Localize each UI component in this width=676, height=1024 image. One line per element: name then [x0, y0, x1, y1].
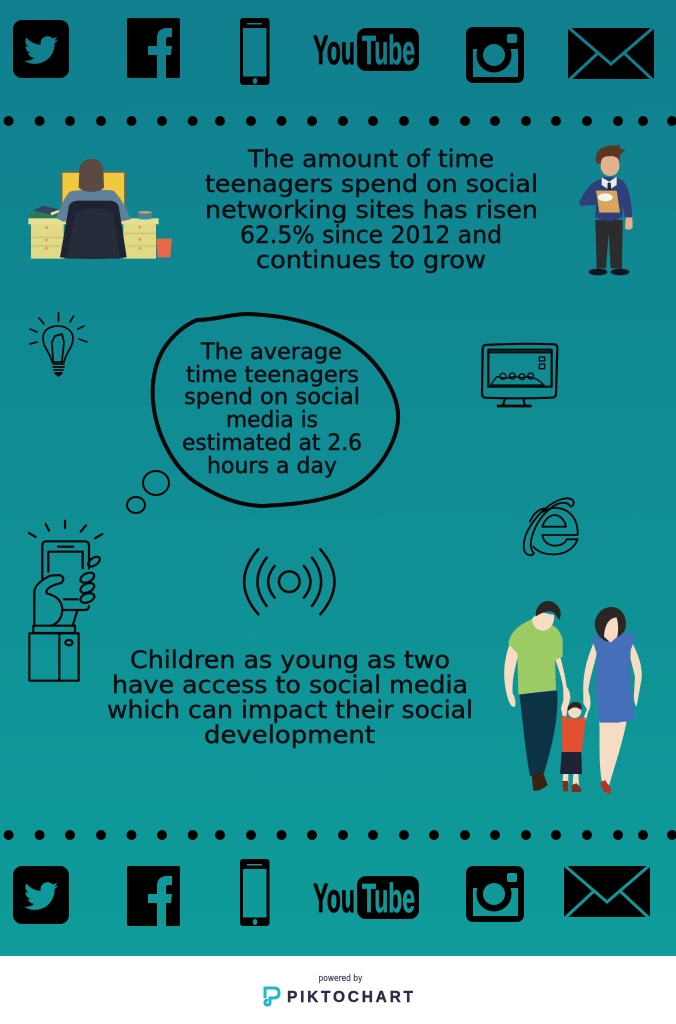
- top icon row: [13, 18, 654, 85]
- illustration: student: [579, 144, 633, 275]
- thought bubble: [127, 314, 398, 513]
- icon: facebook: [127, 866, 180, 926]
- icon: facebook: [127, 18, 180, 78]
- text block: time on social sites: 62.5% since 2012 and: [240, 221, 502, 249]
- text block: time on social sites: continues to grow: [256, 246, 486, 274]
- footer: powered by piktochart: [0, 956, 676, 1024]
- icon: youtube: You: [313, 27, 355, 73]
- text block: children: [107, 646, 473, 749]
- icon: broadcast signal: [244, 549, 334, 614]
- text block: children: Children as young as two: [130, 646, 450, 674]
- icon: youtube: Tube: [362, 875, 415, 921]
- icon: envelope: [564, 865, 650, 918]
- bottom icon row: [13, 859, 650, 926]
- icon: youtube: You: [313, 875, 355, 921]
- icon: twitter: [13, 20, 69, 78]
- thought dots: [127, 471, 169, 513]
- icon: internet explorer: [524, 498, 578, 555]
- icon: youtube: Tube: [362, 27, 415, 73]
- text block: average time: The average: [200, 340, 342, 365]
- icon: smartphone: [240, 18, 270, 85]
- text block: average time: spend on social: [184, 385, 360, 410]
- text block: children: have access to social media: [112, 671, 468, 699]
- text block: children: which can impact their social: [107, 696, 473, 724]
- icon: instagram: [466, 27, 524, 83]
- icon: hand holding phone: [29, 521, 102, 681]
- text block: average time: media is: [226, 408, 318, 433]
- illustration: person at desk: [28, 159, 172, 259]
- text block: average time: hours a day: [207, 454, 337, 479]
- icon: envelope: [568, 27, 654, 80]
- illustration: family: [504, 601, 642, 794]
- icon: light bulb: [30, 313, 87, 376]
- powered by label: powered by: [318, 974, 362, 984]
- text block: time on social sites: The amount of time: [247, 145, 494, 173]
- piktochart wordmark: PIKTOCHART: [287, 989, 414, 1006]
- text block: time on social sites: [205, 145, 538, 274]
- piktochart logo mark: [265, 988, 279, 1005]
- icon: twitter: [13, 866, 69, 924]
- icon: monitor sketch: [482, 344, 557, 406]
- text block: time on social sites: networking sites has risen: [205, 196, 538, 224]
- text block: time on social sites: teenagers spend on social: [205, 170, 538, 198]
- icon: instagram: [466, 866, 524, 922]
- text block: children: development: [204, 721, 375, 749]
- text block: average time: [182, 340, 362, 479]
- text block: average time: time teenagers: [186, 363, 359, 388]
- dotted divider bottom: [4, 830, 676, 840]
- icon: smartphone: [240, 859, 270, 926]
- text block: average time: estimated at 2.6: [182, 431, 362, 456]
- dotted divider top: [4, 116, 676, 126]
